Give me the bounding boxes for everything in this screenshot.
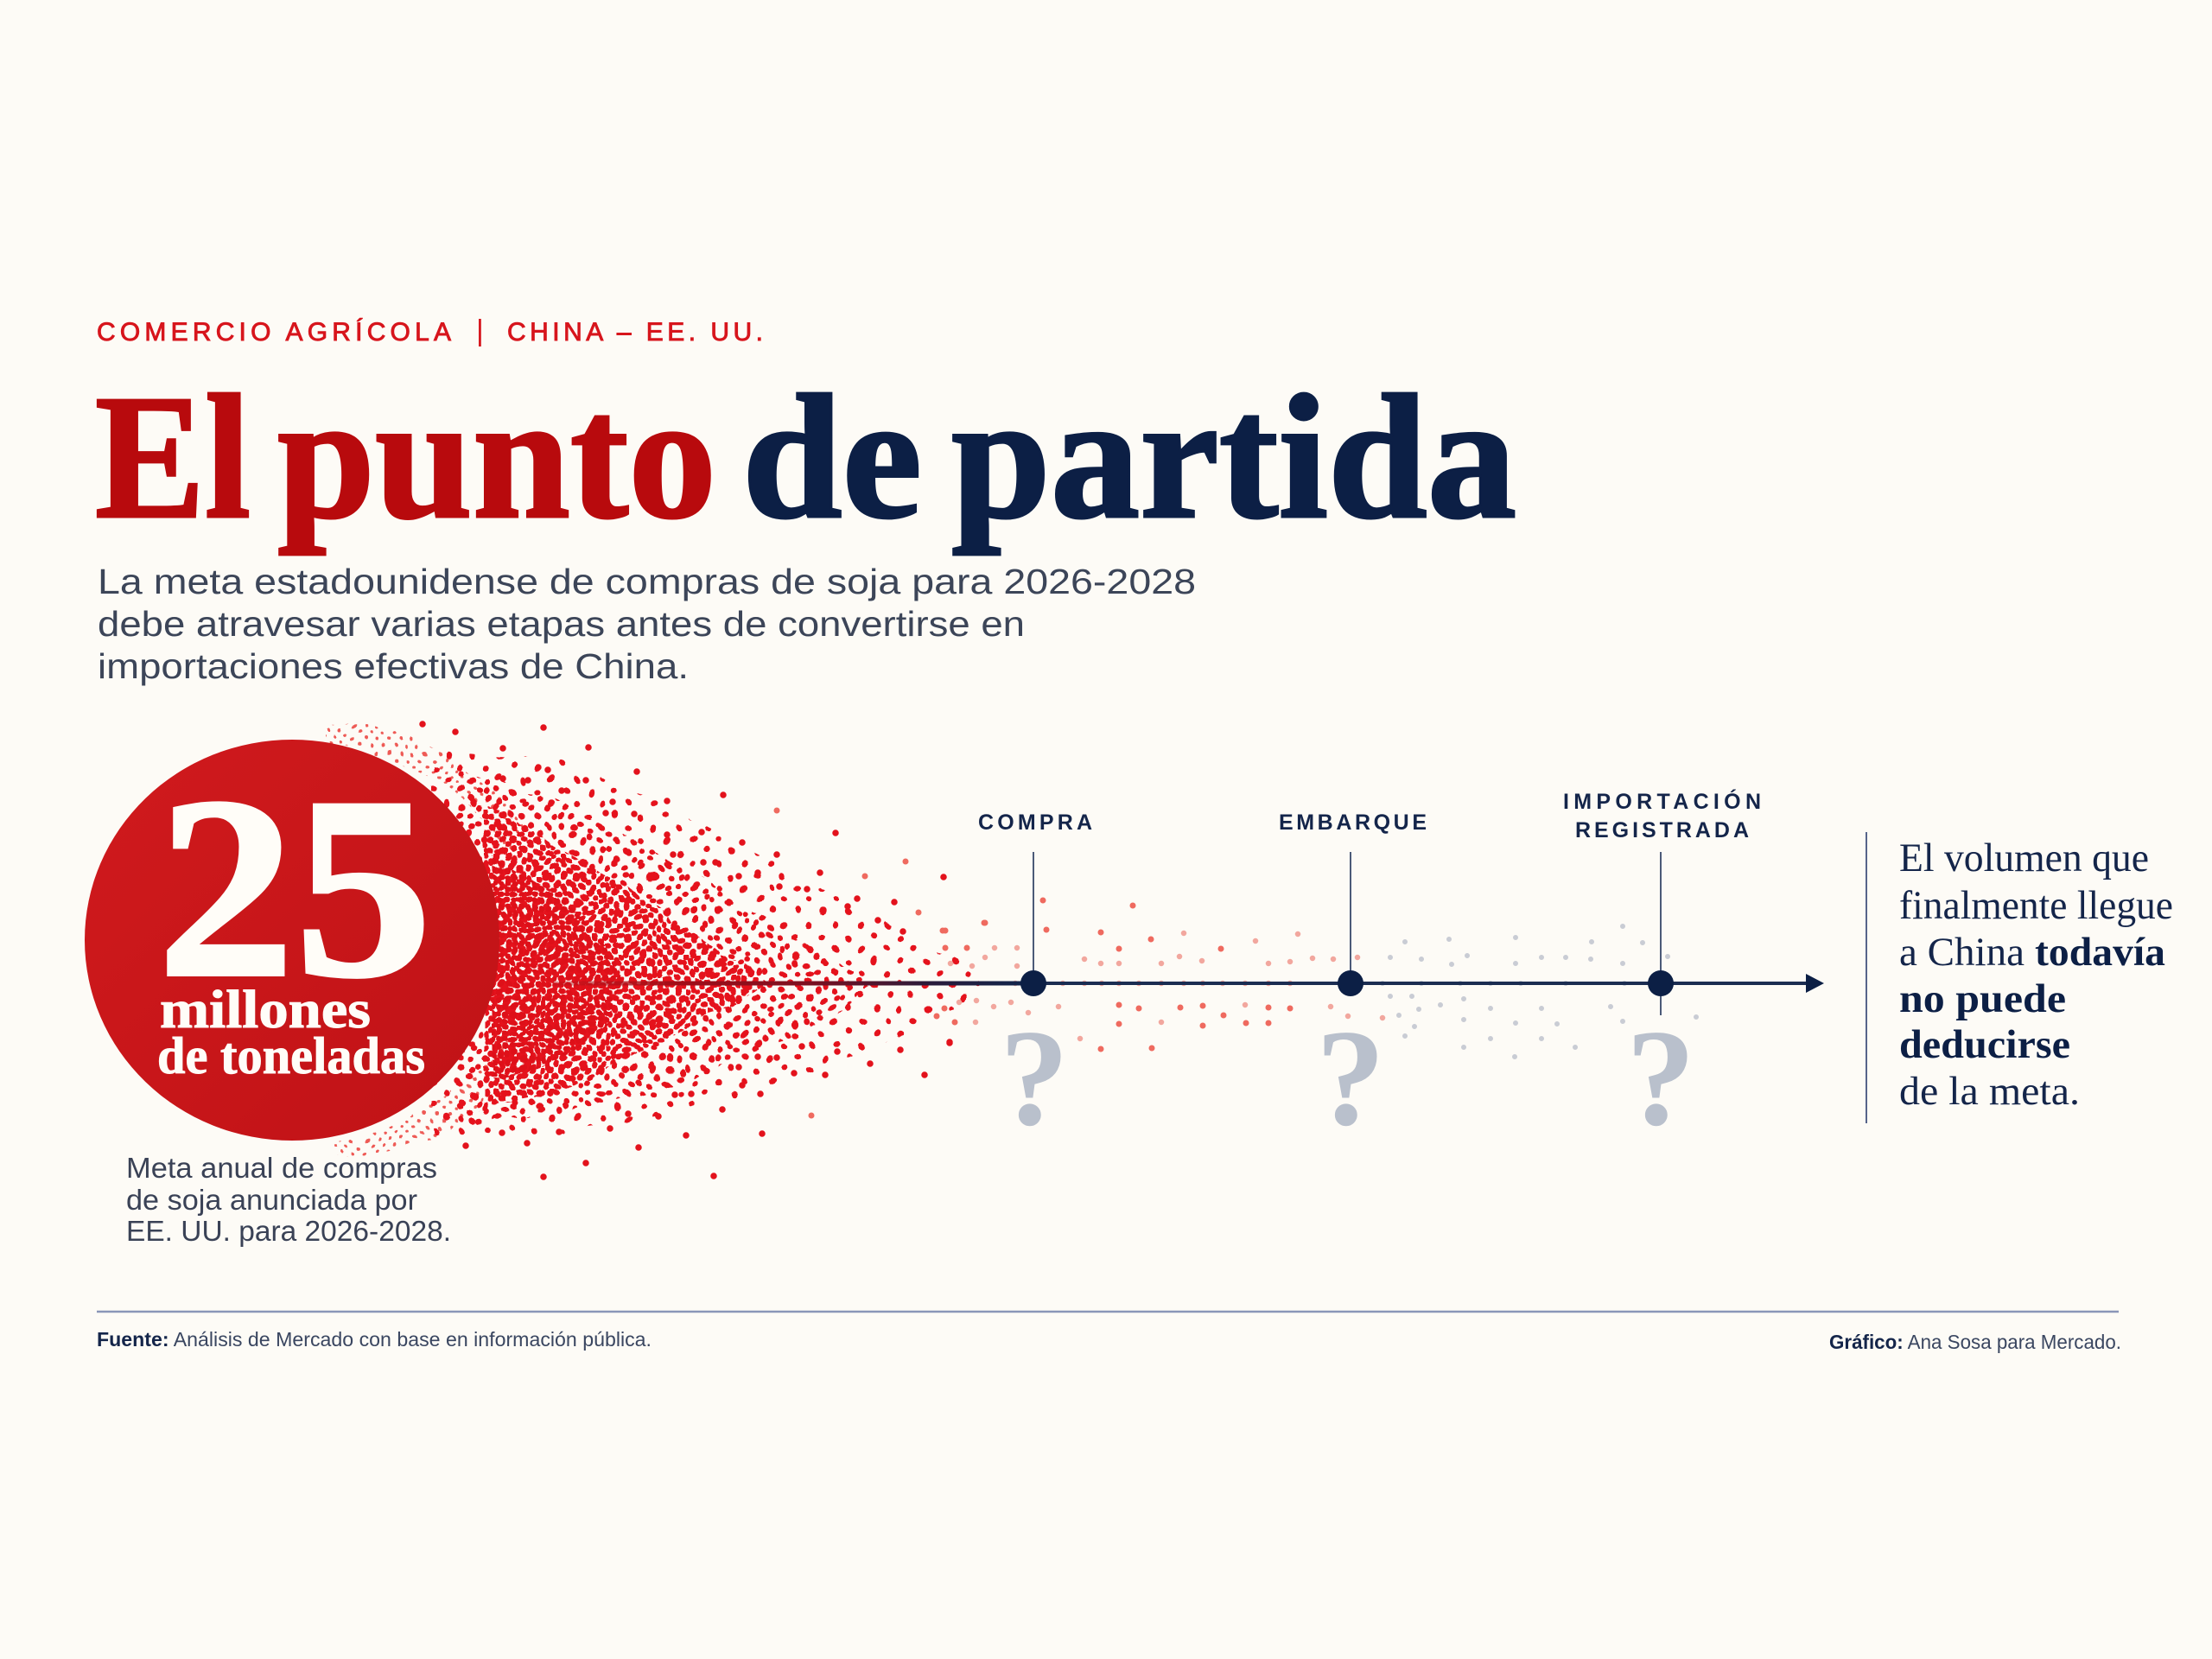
conclusion text: finalmente llegue [1899, 883, 2173, 928]
conclusion text: no puede [1899, 976, 2066, 1021]
title: partida [951, 358, 1516, 556]
unit label: millones [160, 981, 371, 1039]
axis streak and line with arrowhead [553, 974, 1824, 993]
stage: Compra: ? [1000, 1001, 1069, 1154]
subtitle [98, 562, 1196, 686]
conclusion text: de la meta. [1899, 1069, 2080, 1114]
red circle with key figure [85, 740, 499, 1141]
unit label [157, 981, 425, 1084]
timeline [553, 788, 1824, 1154]
particle cloud dissolving from the circle [320, 709, 1696, 1177]
footer source: Fuente: Análisis de Mercado con base en información pública. [97, 1328, 652, 1351]
eyebrow: section tag: CHINA – EE. UU. [507, 318, 763, 346]
subtitle: La meta estadounidense de compras de soja para 2026-2028 [98, 562, 1196, 601]
big number 25: 25 [157, 744, 432, 1031]
subtitle: debe atravesar varias etapas antes de convertirse en [98, 604, 1025, 644]
eyebrow: section tag: COMERCIO AGRÍCOLA [97, 318, 451, 346]
title [95, 358, 1516, 556]
circle caption [126, 1152, 451, 1247]
stage: Embarque: EMBARQUE [1279, 810, 1427, 835]
conclusion text [1899, 836, 2173, 1114]
unit label: de toneladas [157, 1027, 425, 1084]
subtitle: importaciones efectivas de China. [98, 646, 689, 686]
footer rule [97, 1311, 2119, 1313]
eyebrow: section tag: | [476, 315, 484, 347]
circle caption: Meta anual de compras [126, 1152, 437, 1184]
title: punto [277, 358, 716, 556]
conclusion text: todavía [2035, 930, 2165, 975]
stage: Importación registrada: IMPORTACIÓN [1563, 788, 1761, 814]
title: El [95, 358, 251, 556]
stage: Importación registrada: ? [1626, 1001, 1695, 1154]
conclusion text: a China [1899, 930, 2024, 975]
stage: Embarque: ? [1316, 1001, 1385, 1154]
footer credit: Gráfico: Ana Sosa para Mercado. [1829, 1331, 2121, 1353]
infographic canvas [85, 318, 2172, 1353]
stage: Importación registrada [1563, 788, 1761, 1154]
circle caption: EE. UU. para 2026-2028. [126, 1215, 451, 1247]
eyebrow: section tag [97, 315, 763, 347]
conclusion text: El volumen que [1899, 836, 2149, 880]
conclusion panel [1866, 832, 2173, 1123]
circle caption: de soja anunciada por [126, 1184, 417, 1216]
stage: Compra: COMPRA [978, 810, 1092, 835]
stage: Importación registrada: REGISTRADA [1575, 818, 1749, 842]
stage: Embarque [1279, 810, 1427, 1154]
title: de [742, 358, 922, 556]
stage: Compra [978, 810, 1092, 1154]
conclusion text: deducirse [1899, 1022, 2070, 1067]
